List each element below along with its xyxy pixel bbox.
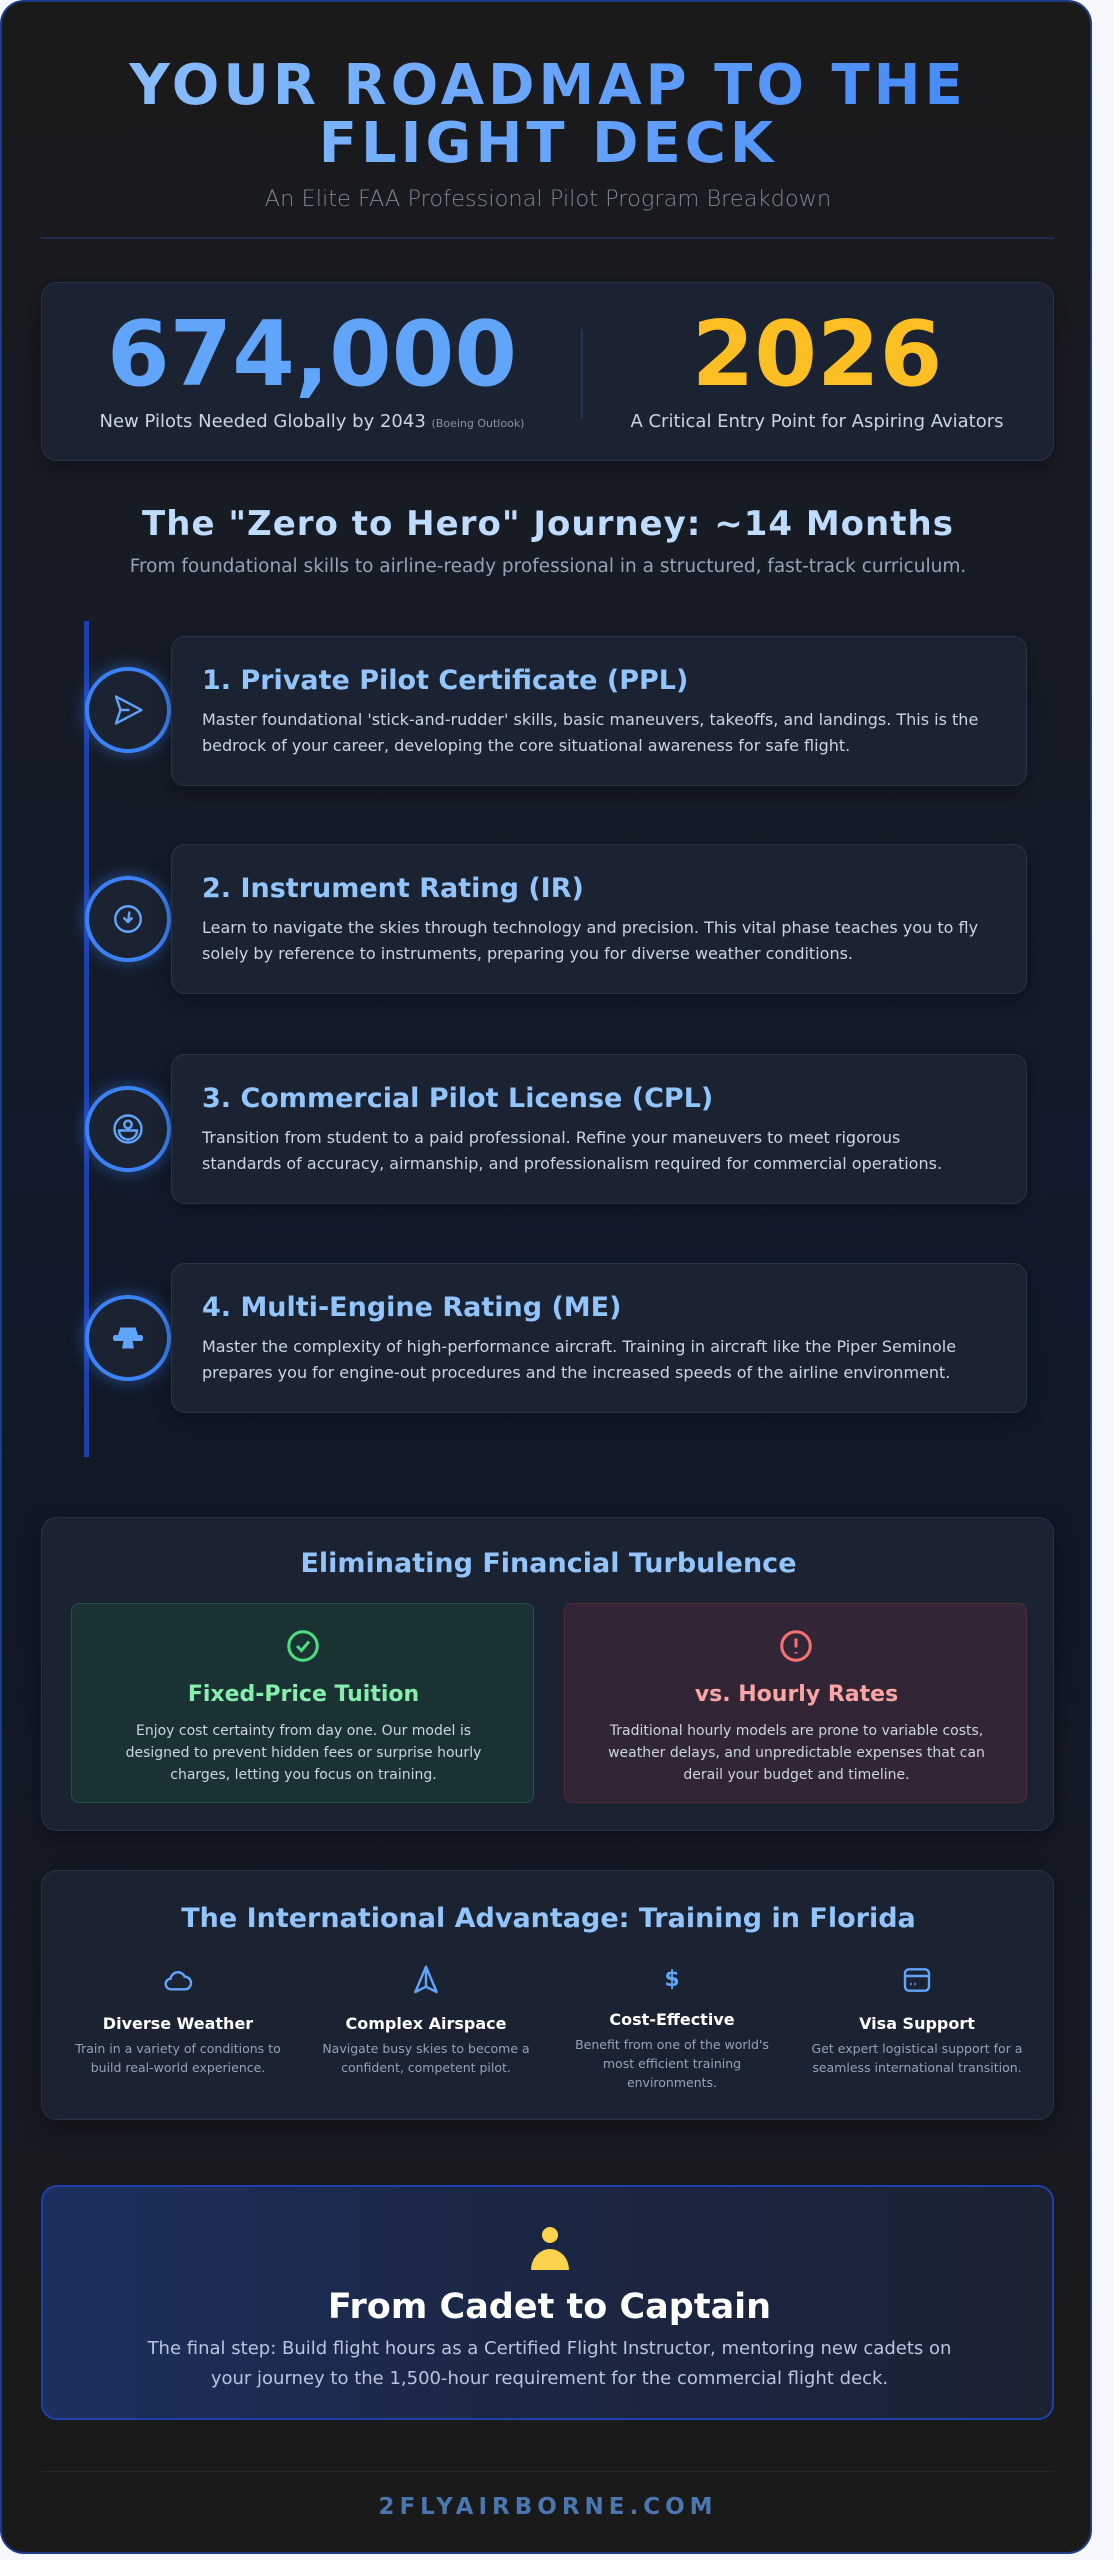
icon: alert	[780, 1630, 812, 1662]
icon: check	[287, 1630, 319, 1662]
box: fixed price: Fixed-Price Tuition	[188, 1682, 419, 1707]
card: step 2: 2. Instrument Rating (IR)	[202, 873, 584, 904]
icon: step 3 pilot	[85, 1086, 171, 1172]
column: weather: Train in a variety of conditions to build real-world experience.	[75, 2041, 281, 2075]
panel: cta: The final step: Build flight hours as a Certified Flight Instructor, mentoring new cadets on your journey to the 1,500-hour requirement for the commercial flight deck.	[148, 2338, 951, 2389]
box: fixed price	[71, 1603, 534, 1803]
column: visa: Get expert logistical support for a seamless international transition.	[812, 2041, 1022, 2075]
card: step 1: 1. Private Pilot Certificate (PPL)	[202, 665, 688, 696]
card: step 4: Master the complexity of high-performance aircraft. Training in aircraft like the Piper Seminole prepares you for engine-out procedures and the increased speeds of the airline environment.	[202, 1337, 956, 1382]
heading: journey	[130, 504, 966, 577]
card: step 1	[171, 636, 1027, 786]
title: YOUR ROADMAP TO THE	[129, 53, 967, 118]
card: step 3: 3. Commercial Pilot License (CPL)	[202, 1083, 713, 1114]
heading: The International Advantage: Training in Florida	[181, 1903, 916, 1934]
card: step 3: Transition from student to a paid professional. Refine your maneuvers to meet rigorous standards of accuracy, airmanship, and professionalism required for commercial operations.	[202, 1128, 942, 1173]
panel: stats	[41, 282, 1054, 461]
heading: Eliminating Financial Turbulence	[300, 1548, 797, 1579]
panel: cta: From Cadet to Captain	[328, 2287, 771, 2327]
panel: cta	[41, 2185, 1054, 2420]
subtitle: An Elite FAA Professional Pilot Program Breakdown	[265, 186, 831, 212]
icon: step 4 aircraft	[85, 1295, 171, 1381]
card: step 2	[171, 844, 1027, 994]
box: hourly	[564, 1603, 1027, 1803]
column: cost: Cost-Effective	[609, 2010, 735, 2029]
stat: 2026	[630, 302, 1004, 432]
icon: step 2 compass	[85, 876, 171, 962]
column: cost: $	[664, 1967, 680, 1992]
stat: 2026: 2026	[692, 302, 942, 407]
card: step 1: Master foundational 'stick-and-rudder' skills, basic maneuvers, takeoffs, and landings. This is the bedrock of your career, developing the core situational awareness for safe flight.	[202, 710, 978, 755]
timeline line	[84, 621, 89, 1457]
card: step 3	[171, 1054, 1027, 1204]
column: visa	[812, 1968, 1022, 2075]
stat: 2026: A Critical Entry Point for Aspiring Aviators	[630, 411, 1004, 432]
icon: person	[531, 2227, 569, 2270]
box: fixed price: Enjoy cost certainty from day one. Our model is designed to prevent hidden fees or surprise hourly charges, letting you focus on training.	[126, 1723, 481, 1783]
panel: florida	[41, 1870, 1054, 2120]
stat: pilots needed: 674,000	[107, 302, 517, 407]
title: FLIGHT DECK	[319, 111, 777, 176]
column: airspace: Complex Airspace	[346, 2014, 506, 2033]
heading: journey: From foundational skills to airline-ready professional in a structured, fast-track curriculum.	[130, 556, 966, 577]
card: step 4: 4. Multi-Engine Rating (ME)	[202, 1292, 621, 1323]
column: airspace	[322, 1965, 530, 2075]
title	[2, 57, 1094, 173]
column: cost	[575, 1967, 769, 2090]
heading: journey: The "Zero to Hero" Journey: ~14 Months	[142, 504, 954, 544]
box: hourly: vs. Hourly Rates	[695, 1682, 898, 1707]
box: hourly: Traditional hourly models are prone to variable costs, weather delays, and unpredictable expenses that can derail your budget and timeline.	[608, 1723, 985, 1783]
column: visa: Visa Support	[859, 2014, 975, 2033]
footer: 2FLYAIRBORNE.COM	[378, 2494, 718, 2520]
icon: step 1 plane	[85, 667, 171, 753]
column: airspace: Navigate busy skies to become a confident, competent pilot.	[322, 2041, 530, 2075]
stat: pilots needed: New Pilots Needed Globally by 2043 (Boeing Outlook)	[100, 411, 524, 432]
column: weather	[75, 1971, 281, 2075]
card: step 4	[171, 1263, 1027, 1413]
card: step 2: Learn to navigate the skies through technology and precision. This vital phase teaches you to fly solely by reference to instruments, preparing you for diverse weather conditions.	[202, 918, 978, 963]
panel: financial	[41, 1517, 1054, 1831]
column: weather: Diverse Weather	[103, 2014, 253, 2033]
column: cost: Benefit from one of the world's most efficient training environments.	[575, 2037, 769, 2090]
